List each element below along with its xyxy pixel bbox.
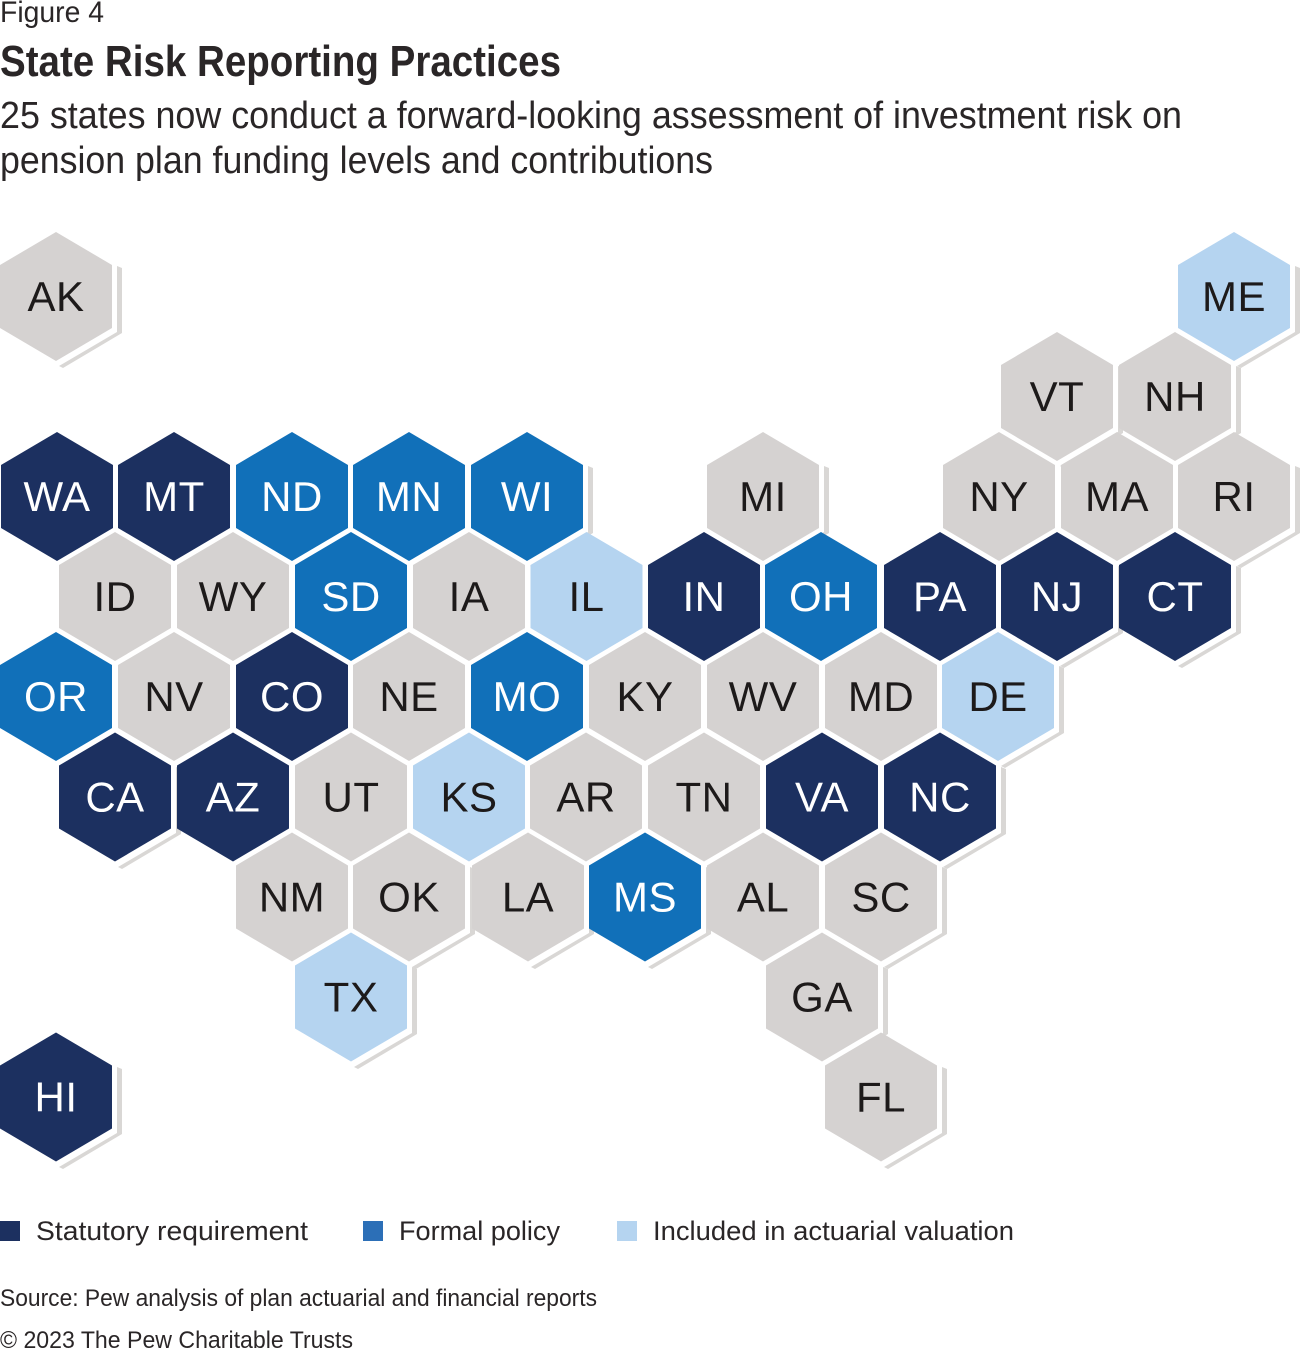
- state hex: ME: [1178, 232, 1290, 361]
- state hex: OH: [765, 532, 877, 661]
- state hex: WY: [177, 532, 289, 661]
- state hex: WA: [1, 432, 113, 561]
- state hex: IA: IA: [449, 573, 489, 620]
- state hex: SC: SC: [851, 874, 911, 920]
- state hex: ID: ID: [94, 573, 136, 620]
- state hex: SC: [825, 832, 937, 962]
- state hex: CT: CT: [1146, 573, 1204, 620]
- state hex: KS: [413, 732, 525, 862]
- state hex: IA: [413, 532, 525, 661]
- state hex: CA: CA: [85, 774, 145, 820]
- state hex: ME: ME: [1202, 273, 1266, 320]
- state hex: TN: [648, 732, 760, 862]
- state hex: MN: MN: [376, 473, 442, 520]
- state hex: FL: [825, 1032, 937, 1162]
- state hex: KS: KS: [440, 774, 498, 820]
- state hex: AZ: AZ: [206, 774, 260, 820]
- state hex: RI: RI: [1212, 473, 1256, 520]
- state hex: AK: [0, 232, 112, 361]
- state hex: AL: [707, 832, 819, 962]
- state hex: NV: [118, 632, 230, 761]
- source note: Source: Pew analysis of plan actuarial and financial reports: [0, 1285, 597, 1312]
- state hex: LA: LA: [502, 874, 554, 920]
- state hex: NE: [353, 632, 465, 761]
- state hex: WY: WY: [199, 573, 267, 620]
- state hex: IL: [530, 532, 642, 661]
- subtitle: [0, 95, 1182, 182]
- state hex: HI: [0, 1032, 112, 1162]
- state hex: WI: WI: [501, 473, 553, 520]
- state hex: OK: OK: [378, 874, 440, 920]
- state hex: AR: AR: [556, 774, 616, 820]
- state hex: ND: ND: [261, 473, 323, 520]
- state hex: MS: [589, 832, 701, 962]
- state hex: AR: [530, 732, 642, 862]
- legend item: included in actuarial valuation: Included in actuarial valuation: [653, 1216, 1014, 1246]
- state hex: NC: NC: [909, 774, 971, 820]
- state hex: DE: [942, 632, 1054, 761]
- state hex: MN: [353, 432, 465, 561]
- state hex: VA: [766, 732, 878, 862]
- state hex: WI: [471, 432, 583, 561]
- state hex: UT: UT: [322, 774, 380, 820]
- state hex: TX: TX: [324, 974, 378, 1020]
- state hex: MD: [825, 632, 937, 761]
- state hex: GA: GA: [791, 974, 853, 1020]
- state hex: MA: MA: [1085, 473, 1149, 520]
- state hex: PA: [884, 532, 996, 661]
- hex shadows: [59, 266, 1300, 1169]
- state hex: WA: WA: [23, 473, 91, 520]
- state hex: NJ: NJ: [1031, 573, 1083, 620]
- state hex: SD: [295, 532, 407, 661]
- state hex: MA: [1061, 432, 1173, 561]
- state hex: DE: DE: [968, 673, 1028, 720]
- state hex: CA: [59, 732, 171, 862]
- state hex: SD: SD: [321, 573, 381, 620]
- state hex: RI: [1178, 432, 1290, 561]
- state hex: HI: HI: [34, 1074, 78, 1120]
- state hex: MO: MO: [493, 673, 561, 720]
- state hex: MD: MD: [848, 673, 914, 720]
- state hex: AL: AL: [737, 874, 789, 920]
- legend: [0, 1216, 1014, 1246]
- state hex: MI: MI: [739, 473, 787, 520]
- state hex: NH: NH: [1144, 373, 1206, 420]
- state hex: NY: [943, 432, 1055, 561]
- state hex: IL: IL: [568, 573, 605, 620]
- state hex: NM: [236, 832, 348, 962]
- state hex: NC: [884, 732, 996, 862]
- state hex: KY: KY: [616, 673, 674, 720]
- state hex: IN: IN: [682, 573, 726, 620]
- state hex: LA: [472, 832, 584, 962]
- state hex: ID: [59, 532, 171, 661]
- state hex: FL: FL: [856, 1074, 906, 1120]
- state hex: MT: [118, 432, 230, 561]
- state hex: KY: [589, 632, 701, 761]
- state hex: ND: [236, 432, 348, 561]
- state hex: TX: [295, 932, 407, 1062]
- state hex: CO: [236, 632, 348, 761]
- state hex: OR: [0, 632, 112, 761]
- state hex: NV: NV: [144, 673, 204, 720]
- state hex: MT: MT: [143, 473, 205, 520]
- state hex: CO: CO: [260, 673, 324, 720]
- state hex: MS: MS: [613, 874, 677, 920]
- state hex: VT: [1001, 332, 1113, 461]
- legend item: statutory requirement: Statutory requirement: [36, 1216, 309, 1246]
- state hex: AZ: [177, 732, 289, 862]
- state hex: VT: VT: [1030, 373, 1084, 420]
- state hex: MO: [471, 632, 583, 761]
- state hex: NE: NE: [379, 673, 439, 720]
- state hex: MI: [707, 432, 819, 561]
- state hex: OR: OR: [24, 673, 88, 720]
- state hex: TN: TN: [676, 774, 732, 820]
- state hex: VA: VA: [795, 774, 849, 820]
- state hex: CT: [1119, 532, 1231, 661]
- state hex: OH: OH: [789, 573, 853, 620]
- state hex: GA: [766, 932, 878, 1062]
- title: State Risk Reporting Practices: [0, 37, 561, 86]
- state hex: NY: NY: [969, 473, 1029, 520]
- subtitle: pension plan funding levels and contributions: [0, 140, 713, 182]
- subtitle: 25 states now conduct a forward-looking assessment of investment risk on: [0, 95, 1182, 137]
- state hex: OK: [353, 832, 465, 962]
- state hex: PA: PA: [913, 573, 967, 620]
- legend item: formal policy: Formal policy: [399, 1216, 560, 1246]
- state hex: UT: [295, 732, 407, 862]
- state hex: IN: [648, 532, 760, 661]
- state hex: NM: NM: [259, 874, 325, 920]
- state hex: WV: [707, 632, 819, 761]
- state hex: WV: WV: [729, 673, 797, 720]
- state hex: AK: AK: [27, 273, 85, 320]
- state hex: NJ: [1001, 532, 1113, 661]
- state hex: NH: [1119, 332, 1231, 461]
